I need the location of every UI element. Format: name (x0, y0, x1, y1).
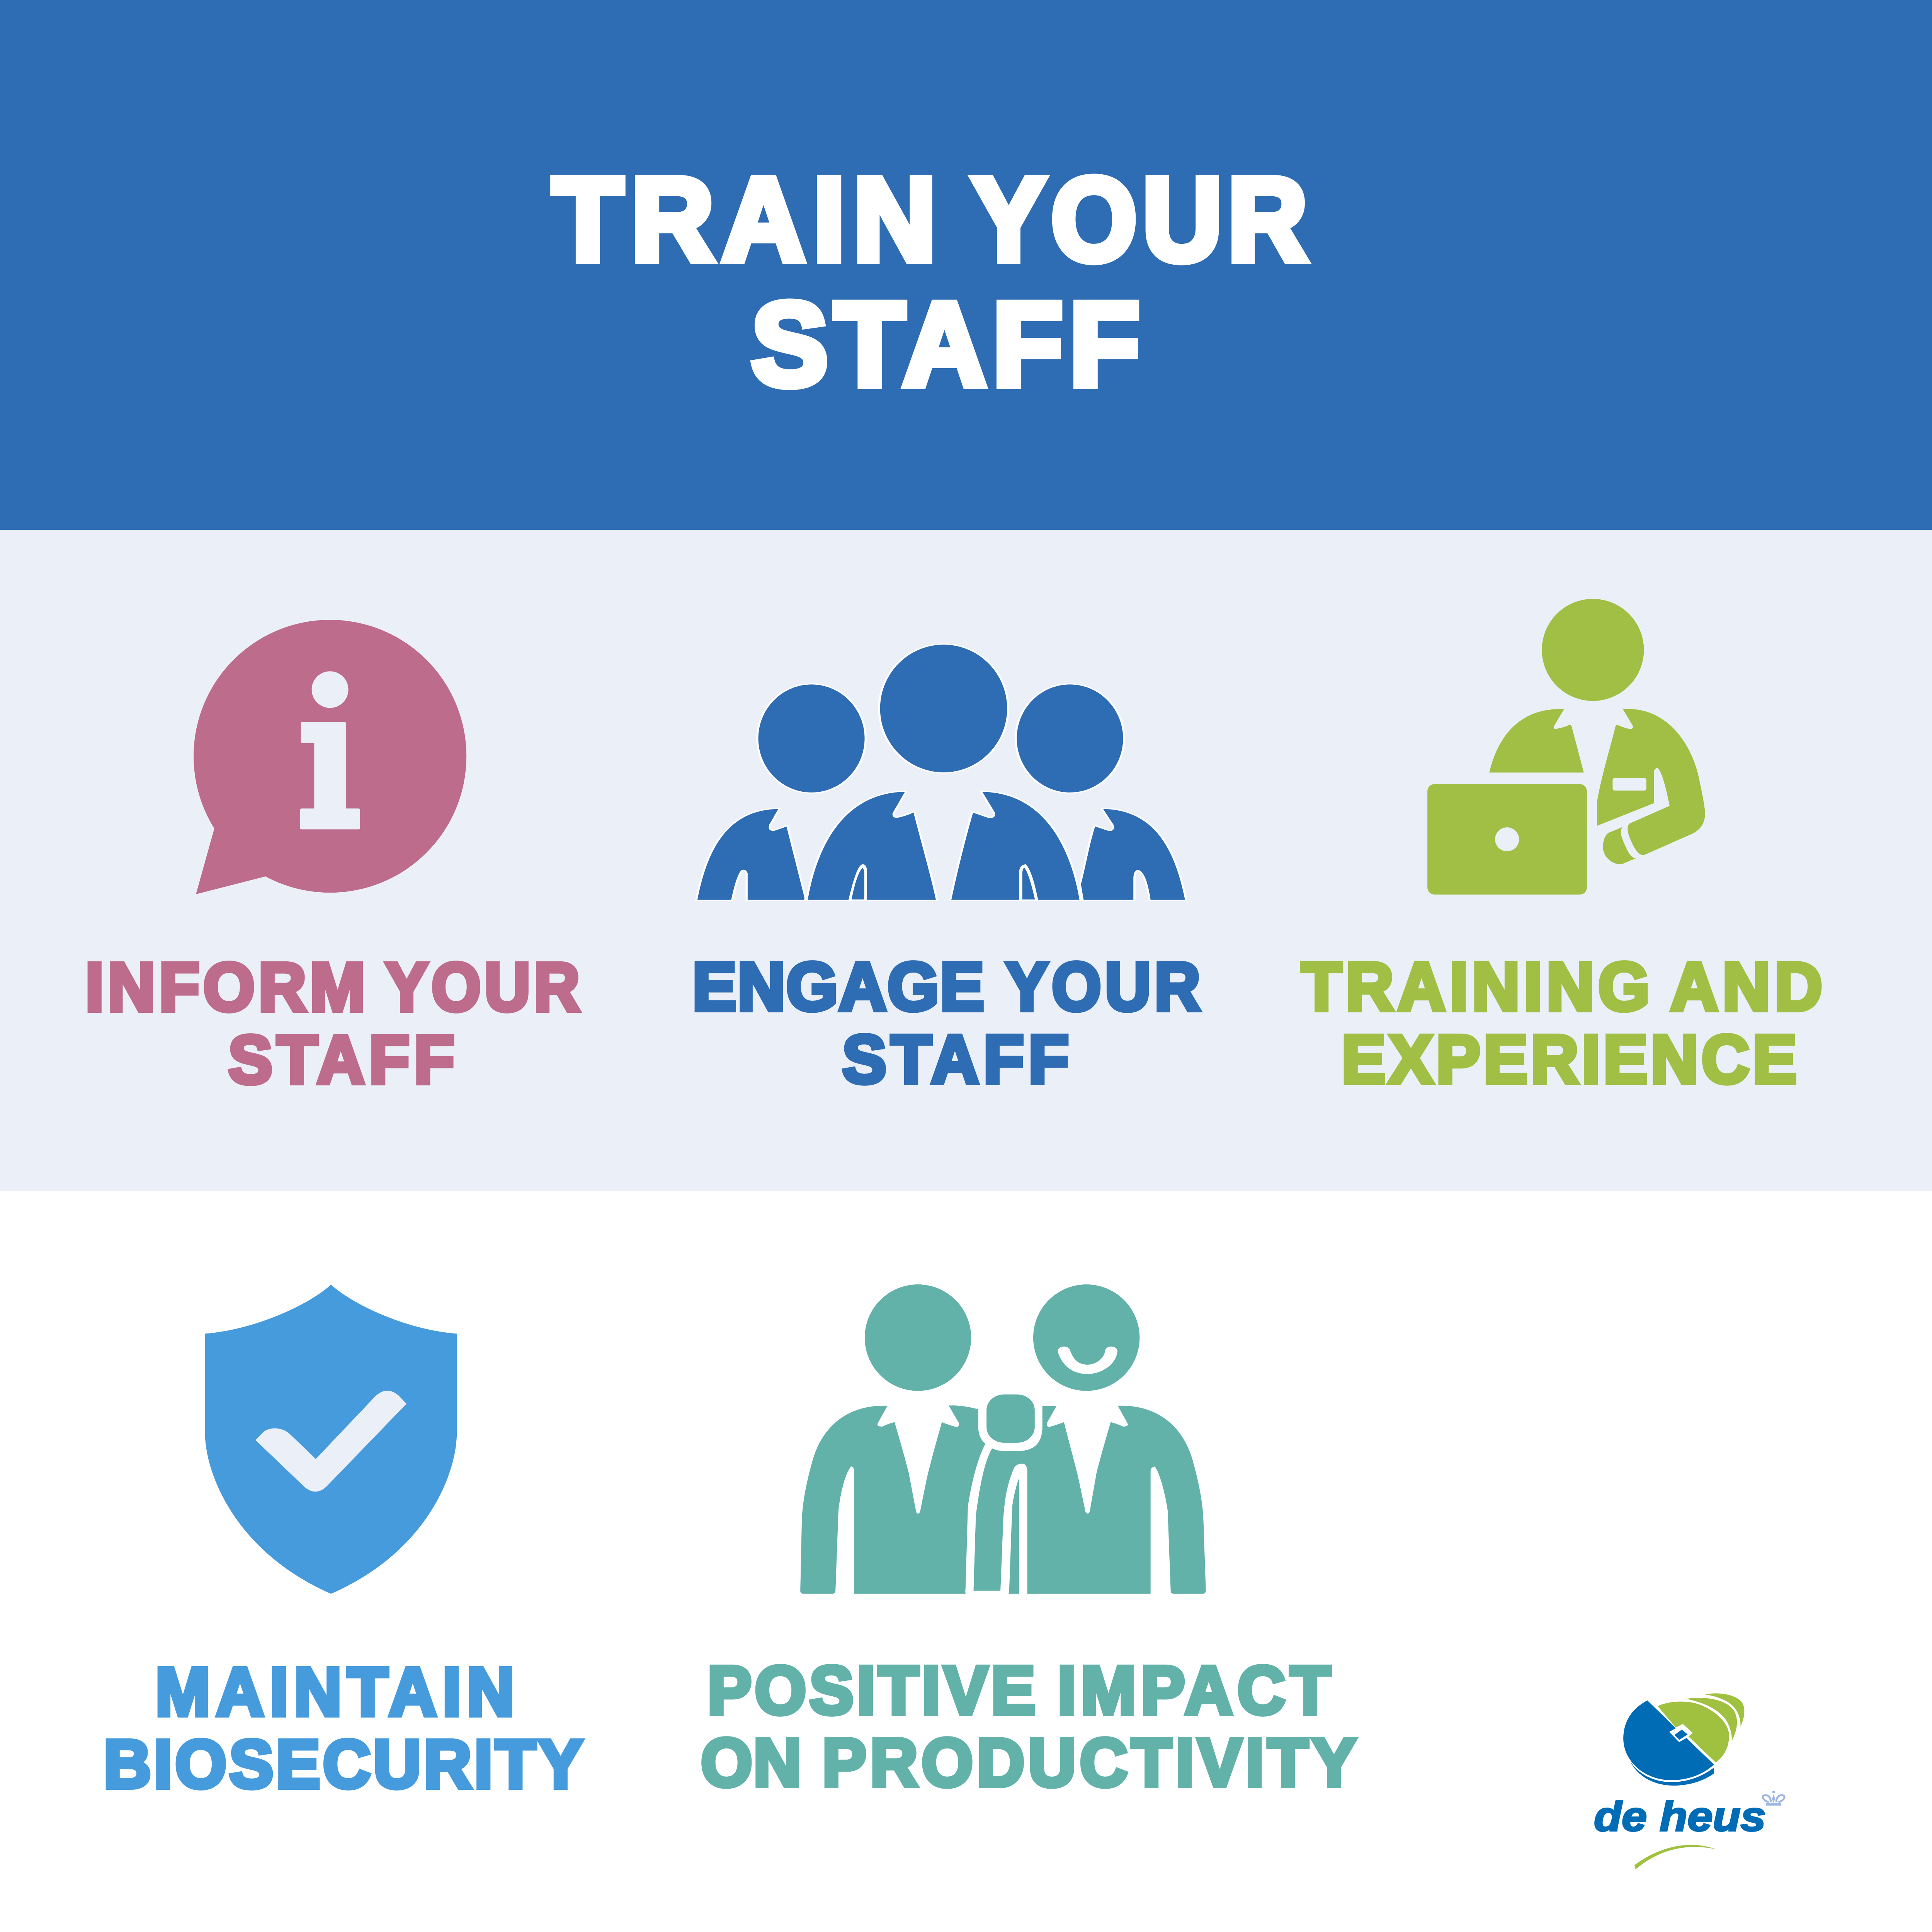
title (553, 153, 1307, 410)
heading: inform your staff: INFORM (85, 949, 365, 1025)
heading: positive impact on productivity: POSITIVE (707, 1652, 1035, 1728)
heading: maintain biosecurity: BIOSECURITY (104, 1726, 583, 1802)
icon: group of three staff (696, 644, 1186, 900)
title: TRAIN (553, 153, 936, 285)
heading: positive impact on productivity: IMPACT (1058, 1652, 1330, 1728)
icon: colleagues with arm around shoulder (800, 1284, 1206, 1594)
panel: white lower section (0, 1191, 1932, 1932)
heading: inform your staff: STAFF (228, 1022, 454, 1098)
heading: maintain biosecurity (104, 1654, 583, 1802)
heading: engage your staff (692, 949, 1200, 1097)
heading: training and experience: AND (1670, 949, 1822, 1025)
heading: positive impact on productivity: ON (701, 1725, 801, 1801)
heading: inform your staff (85, 949, 580, 1098)
icon: information speech bubble (194, 620, 466, 894)
heading: maintain biosecurity: MAINTAIN (155, 1654, 514, 1730)
heading: engage your staff: ENGAGE (692, 949, 984, 1025)
heading: engage your staff: STAFF (842, 1021, 1069, 1097)
heading: positive impact on productivity (701, 1652, 1356, 1801)
title: STAFF (752, 278, 1139, 410)
heading: training and experience: EXPERIENCE (1342, 1021, 1797, 1097)
icon: trainee with laptop (1427, 599, 1705, 895)
heading: training and experience: TRAINING (1301, 949, 1650, 1025)
logo: de heus (1594, 1693, 1784, 1869)
panel: header band (0, 0, 1932, 530)
panel: light band (0, 530, 1932, 1191)
heading: training and experience (1301, 949, 1822, 1097)
heading: positive impact on productivity: PRODUCTIVITY (822, 1725, 1356, 1801)
heading: inform your staff: YOUR (386, 949, 580, 1025)
logo: de heus: de heus (1594, 1793, 1766, 1840)
icon: shield with check mark (205, 1285, 457, 1594)
title: YOUR (972, 154, 1307, 285)
heading: engage your staff: YOUR (1006, 949, 1200, 1025)
